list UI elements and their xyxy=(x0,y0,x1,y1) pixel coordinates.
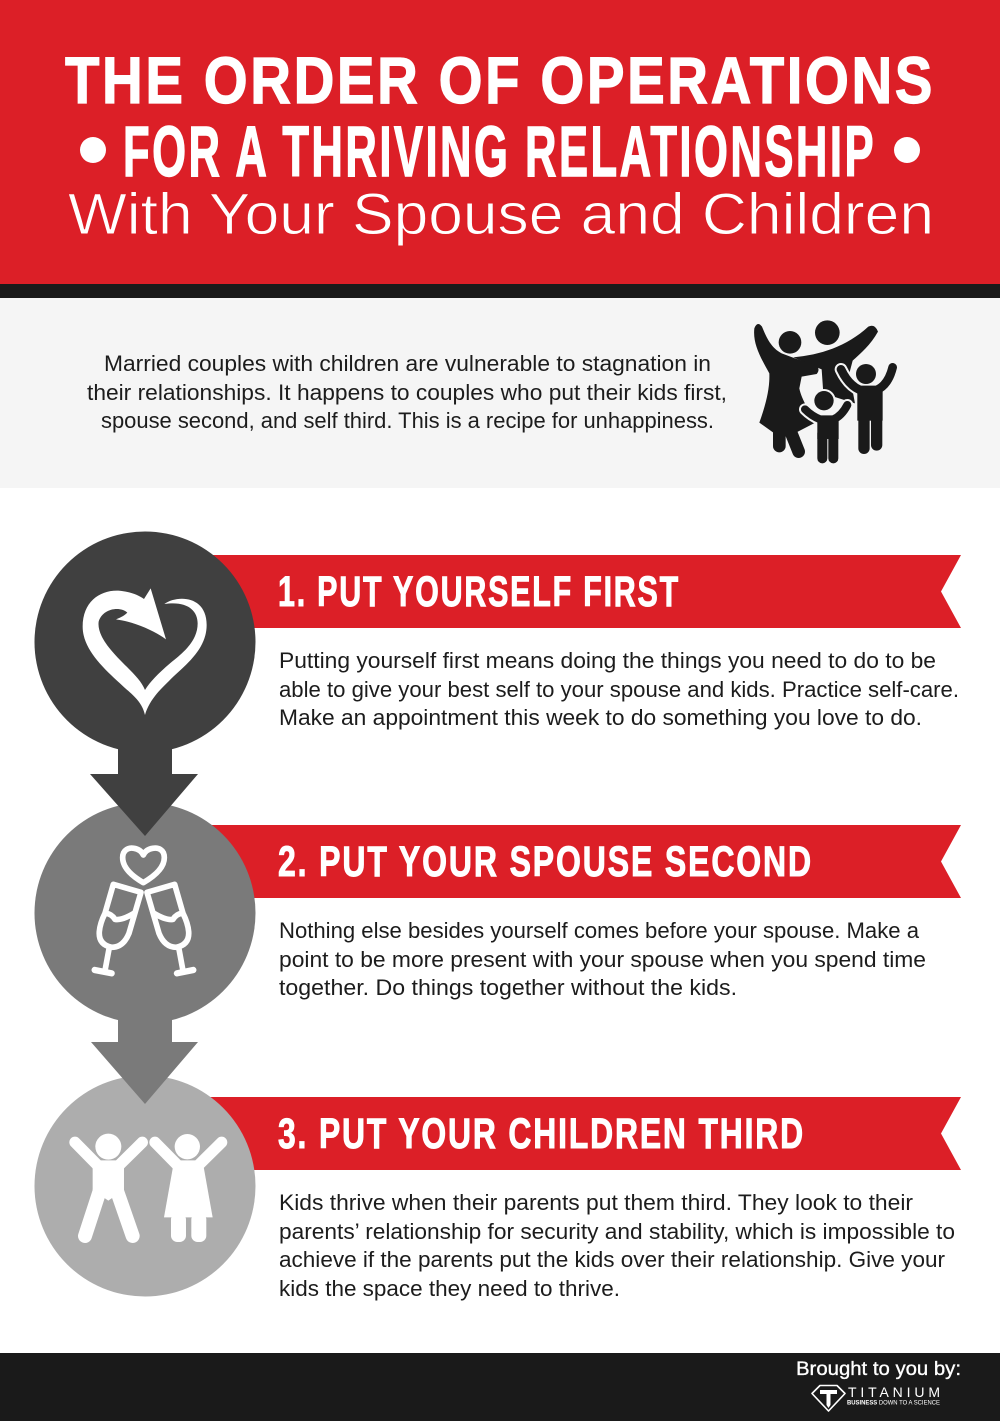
step 1 text: able to give your best self to your spouse and kids. Practice self-care. xyxy=(279,677,959,702)
logo text xyxy=(847,1384,941,1406)
ribbon 1 xyxy=(205,555,961,628)
circle 3 with children icon xyxy=(34,1076,256,1296)
step 3 text: Kids thrive when their parents put them third. They look to their xyxy=(279,1190,914,1215)
icon: family xyxy=(754,320,893,460)
small child xyxy=(805,405,847,460)
step 1 heading: 1. PUT YOURSELF FIRST xyxy=(278,568,680,616)
icon: children xyxy=(75,1134,222,1242)
step 2 heading: 2. PUT YOUR SPOUSE SECOND xyxy=(278,838,813,886)
intro panel xyxy=(0,298,1000,488)
footer xyxy=(0,1353,1000,1421)
logo: titanium diamond xyxy=(812,1386,845,1411)
ribbon 3 xyxy=(205,1097,961,1170)
step 2 text xyxy=(279,918,926,1000)
intro text: spouse second, and self third. This is a recipe for unhappiness. xyxy=(101,408,714,433)
intro text xyxy=(87,351,727,433)
header panel xyxy=(0,0,1000,298)
logo text: BUSINESS DOWN TO A SCIENCE xyxy=(847,1400,941,1406)
arrow 1 with circle 1 xyxy=(34,532,256,836)
arrow 2 with circle 2 xyxy=(34,802,256,1104)
step 3 text xyxy=(279,1190,955,1301)
step 3 text: achieve if the parents put the kids over their relationship. Give your xyxy=(279,1247,946,1272)
step 3 heading: 3. PUT YOUR CHILDREN THIRD xyxy=(278,1110,805,1158)
title line 3: With Your Spouse and Children xyxy=(68,182,934,247)
right child xyxy=(841,367,893,448)
intro text: their relationships. It happens to couples who put their kids first, xyxy=(87,380,727,405)
step 2 text: Nothing else besides yourself comes before your spouse. Make a xyxy=(279,918,919,943)
step 2 text: point to be more present with your spouse when you spend time xyxy=(279,947,926,972)
footer credit: Brought to you by: xyxy=(796,1358,961,1380)
logo text: TITANIUM xyxy=(848,1384,940,1400)
icon: champagne glasses and heart xyxy=(95,848,193,973)
step 1 text: Putting yourself first means doing the things you need to do to be xyxy=(279,648,936,673)
step 2 text: together. Do things together without the kids. xyxy=(279,975,737,1000)
step 1 text xyxy=(279,648,959,730)
icon: heart with arrow xyxy=(83,588,207,715)
step 3 text: parents’ relationship for security and stability, which is impossible to xyxy=(279,1219,955,1244)
intro text: Married couples with children are vulnerable to stagnation in xyxy=(104,351,711,376)
ribbon 2 xyxy=(205,825,961,898)
step 1 text: Make an appointment this week to do something you love to do. xyxy=(279,705,922,730)
step 3 text: kids the space they need to thrive. xyxy=(279,1276,620,1301)
